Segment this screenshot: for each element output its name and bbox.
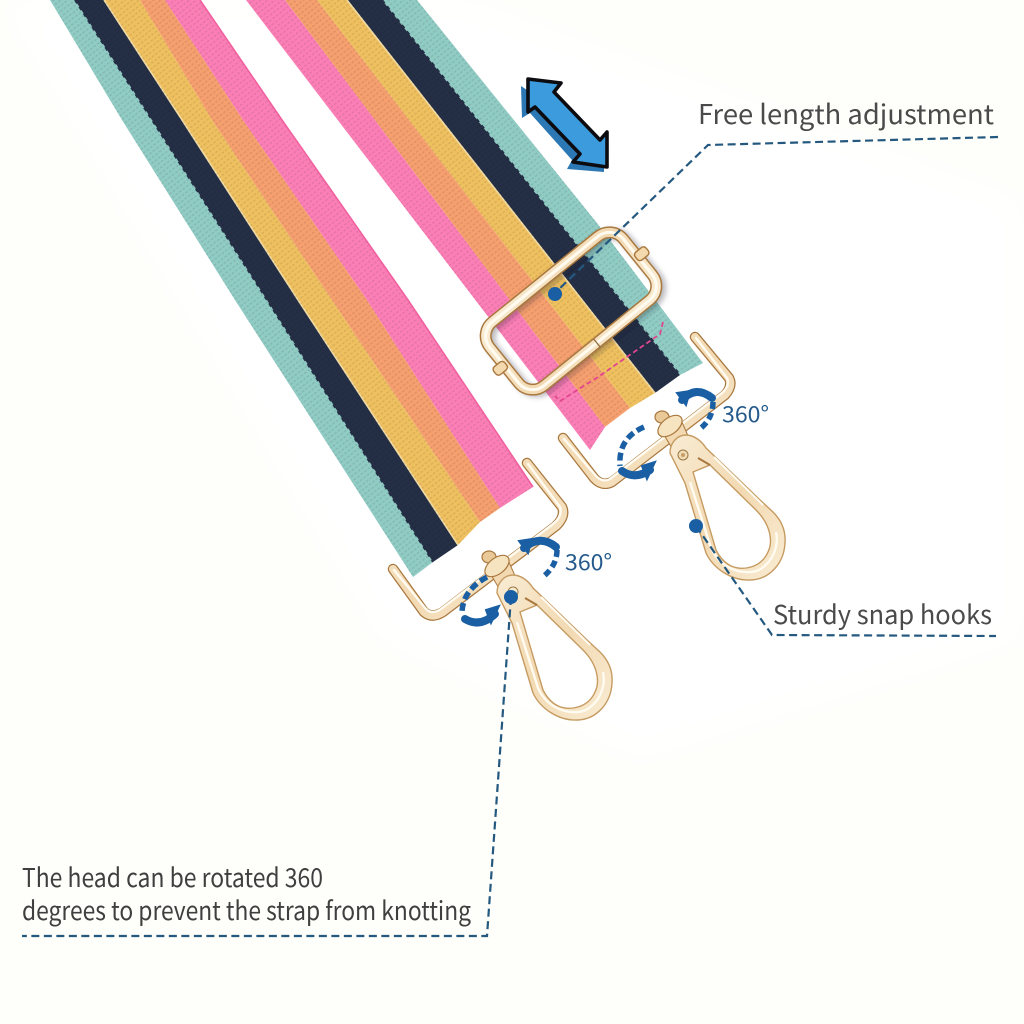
callout: free length adjustment: Free length adjustment (698, 93, 994, 132)
stitching (555, 322, 663, 401)
right snap hook (654, 411, 785, 580)
label: 360 degrees left: 360° (565, 545, 612, 577)
double-headed length arrow (521, 79, 607, 172)
left swivel (481, 551, 516, 590)
slider buckle (469, 217, 677, 409)
callout: sturdy snap hooks: Sturdy snap hooks (773, 595, 992, 632)
rotation arrows: left swivel (462, 539, 557, 623)
left snap hook (481, 551, 612, 720)
buckle pins (633, 245, 650, 262)
left D-ring (393, 463, 563, 616)
rotation arrows: right swivel (620, 391, 713, 479)
callout: head rotation: degrees to prevent the strap from knotting (22, 891, 471, 928)
right D-ring (563, 337, 730, 484)
callout: sturdy snap hooks (689, 519, 996, 636)
callout: head rotation: The head can be rotated 360 (22, 858, 323, 895)
label: 360 degrees right: 360° (722, 397, 769, 429)
callout: head rotation (22, 590, 518, 936)
right swivel (654, 411, 689, 450)
callout: free length adjustment (548, 93, 998, 301)
soft white glow behind straps (0, 0, 1024, 760)
left strap (50, 0, 533, 577)
right strap (246, 0, 703, 450)
